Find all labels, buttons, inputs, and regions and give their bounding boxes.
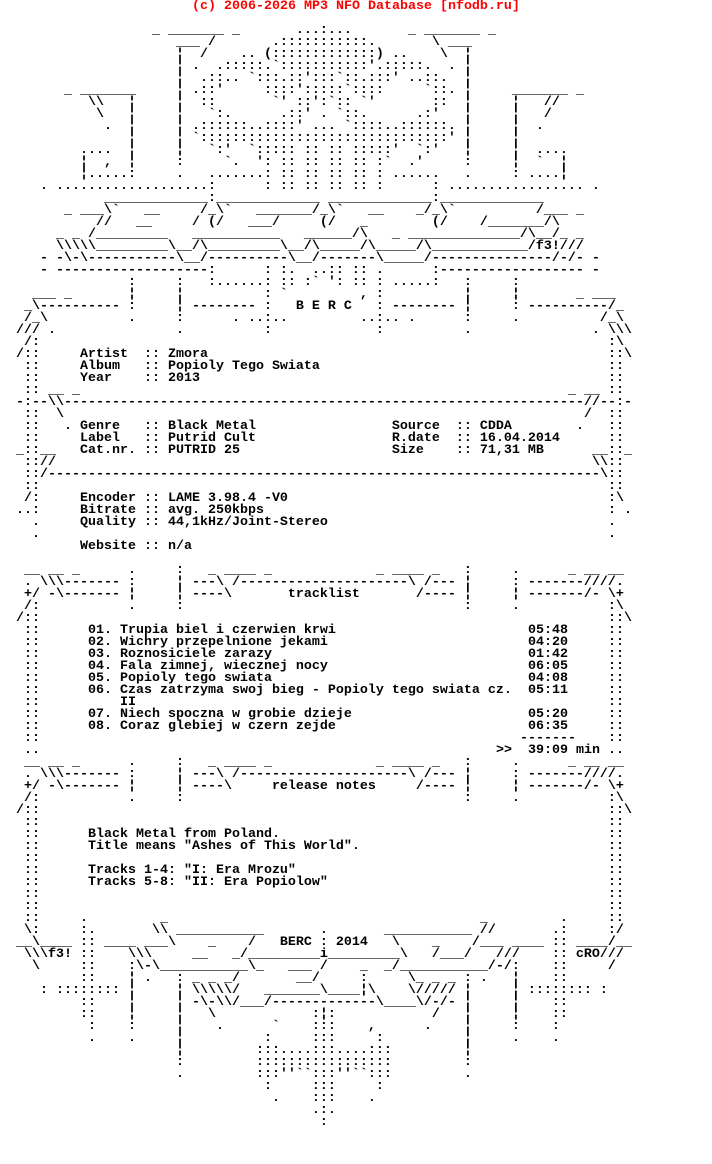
text block: artist, genre and encoder details with left frame: /: /:: Artist :: Zmora :: Album :: Popioly Tego Swiata :: Year :: 2013 :: __ _ -:--\\----------------------------------------------------------------- :: \ :: . Genre :: Black Metal Source :: CDDA :: Label :: Putrid Cult R.date :: 16.04.2014 _::__ Cat.nr. :: PUTRID 25 Size :: 71,31 MB ::// ::/--------------------------------------------------------------------- :: /: Encoder :: LAME 3.98.4 -V0 ..: Bitrate :: avg. 250kbps . Quality :: 44,1kHz/Joint-Stereo . Website :: n/a bbox=[0, 335, 600, 554]
panel: release information bbox=[0, 335, 632, 554]
panel: footer ASCII logo with BERC 2014 credit: :: . _ _ . :: \: :. \\ ___________ . ___________ // .: :/ __\____ :: ____ ___\ _ / BERC : 2014 \ _ /___ ____ :: ____/__ \\\f3! :: \\\ __ _/_________i_________\ /___/ /// :: cRO/// \ :: :\-\___________\_ ___ / _ _/___________/-/: :: / :: ¦ . : _ _ _/ __/ : \_ _ _ : . ¦ :: : :::::::: ¦ ¦ \\\\\/ _______\____¦\ \///// ¦ ¦ :::::::: : :: ¦ ¦ -\-\\/___/-------------\____\/-/- ¦ ¦ :: :: ¦ ¦ \ :¦: / ¦ ¦ :: : : ¦ . ` ::: , . ¦ : : . . ¦ : ::: : ¦ . . ¦ :::....:::....::: ¦ : ::::::::::::::::: : . :::''``:::''``::: . : ::: : . ::: . .:. : bbox=[0, 911, 632, 1130]
panel: tracklist bbox=[0, 611, 632, 758]
right frame of release notes panel: ::\ :: :: :: :: :: :: :: :: bbox=[568, 803, 632, 914]
list of track titles: /:: :: 01. Trupia biel i czerwien krwi :: 02. Wichry przepelnione jekami :: 03. Roznosiciele zarazy :: 04. Fala zimnej, wiecznej nocy :: 05. Popioly tego swiata :: 06. Czas zatrzyma swoj bieg - Popioly tego swiata cz. :: II :: 07. Niech spoczna w grobie dzieje :: 08. Coraz glebiej w czern zejde :: .. bbox=[0, 611, 512, 758]
panel: top ASCII logo with skull tree and BERC banner: _ _______ _ ...:... _ _______ _ ___ / .:::::::::::. \ ___ ¦ / .. (:::::::::::::) .. \ ¦ ¦ . .:::::.`:::::::::::'.:::::. . ¦ ¦ .::.. `:::.::':::`::.:::' ..::. ¦ _ _______ ¦ .::' ::::':::::`:::: `::. ¦ _______ _ \\ ¦ ¦ :: `' ::':`:: `' :: ¦ ¦ // \ ¦ ¦ `:. .::' . `::. .:' ¦ ¦ / . ¦ ¦ .::::::..::::' ... `::::..::::::. ¦ ¦ . ¦ ¦ `:::::::::::::::::::::::::::::::' ¦ ¦ .... ¦ ¦ `:' `::::: :: :: :::::' `:' ¦ ¦ .... ¦ , ¦ : `. ': :: :: :: :: :` .' : ¦ ` ¦ ¦.....: . .......: :: :: :: :: : ...... . : ....¦ . ...................: : :: :: :: :: : : ................. . _____________:_____________ _____________:_____________ _ ___\` __ /_\` _______/_\` __ _/_\` /___ _ // __ / (/ ___/ (/ _ (/ /_______/\ _ _ /_________ ___________ ______/\ _ ______________/\__/_ _ \\\\\_________\__/\_________\__/\_____/\_____/\____________/f3!/// - -\-\-----------\__/----------\__/-------\_____/---------------/-/- - - -------------------: : :. ..:: :: . :------------------ - : : :......: :: :` ': :: : .....: : : ___ _ ¦ ¦ : ` , : ¦ ¦ _ ___ _\---------- : ¦ -------- : B E R C : -------- ¦ : ----------/_ /_\ . : . ..:.. ..:.. . : . /_\ /// . . : : . . \\\ bbox=[0, 23, 632, 338]
text block: release notes: /:: :: :: Black Metal from Poland. :: Title means "Ashes of This World". :: :: Tracks 1-4: "I: Era Mrozu" :: Tracks 5-8: "II: Era Popiolow" :: :: bbox=[0, 803, 360, 914]
heading band: tracklist: __ __ _ . : _ ____ _ _ ____ _ : . _ __ __ . \\\------- : ¦ ---\ /---------------------\ /--- ¦ : -------////. +/ -\------- ¦ ¦ ----\ tracklist /---- ¦ ¦ -------/- \+ /: . : : . :\ bbox=[0, 563, 624, 614]
heading band: release notes: __ __ _ . : _ ____ _ _ ____ _ : . _ __ __ . \\\------- : ¦ ---\ /---------------------\ /--- ¦ : -------////. +/ -\------- ¦ ¦ ----\ release notes /---- ¦ ¦ -------/- \+ /: . : : . :\ bbox=[0, 755, 624, 806]
track durations and total running time: ::\ 05:48 :: 04:20 :: 01:42 :: 06:05 :: 04:08 :: 05:11 :: :: 05:20 :: 06:35 :: ------- :: >> 39:09 min .. bbox=[496, 611, 632, 758]
panel: release notes bbox=[0, 803, 632, 914]
right frame of release information panel: :\ ::\ :: :: _ __ :: //--:- / :: . :: :: __::_ \\:: \:: :: :\ : . . . bbox=[568, 335, 632, 542]
